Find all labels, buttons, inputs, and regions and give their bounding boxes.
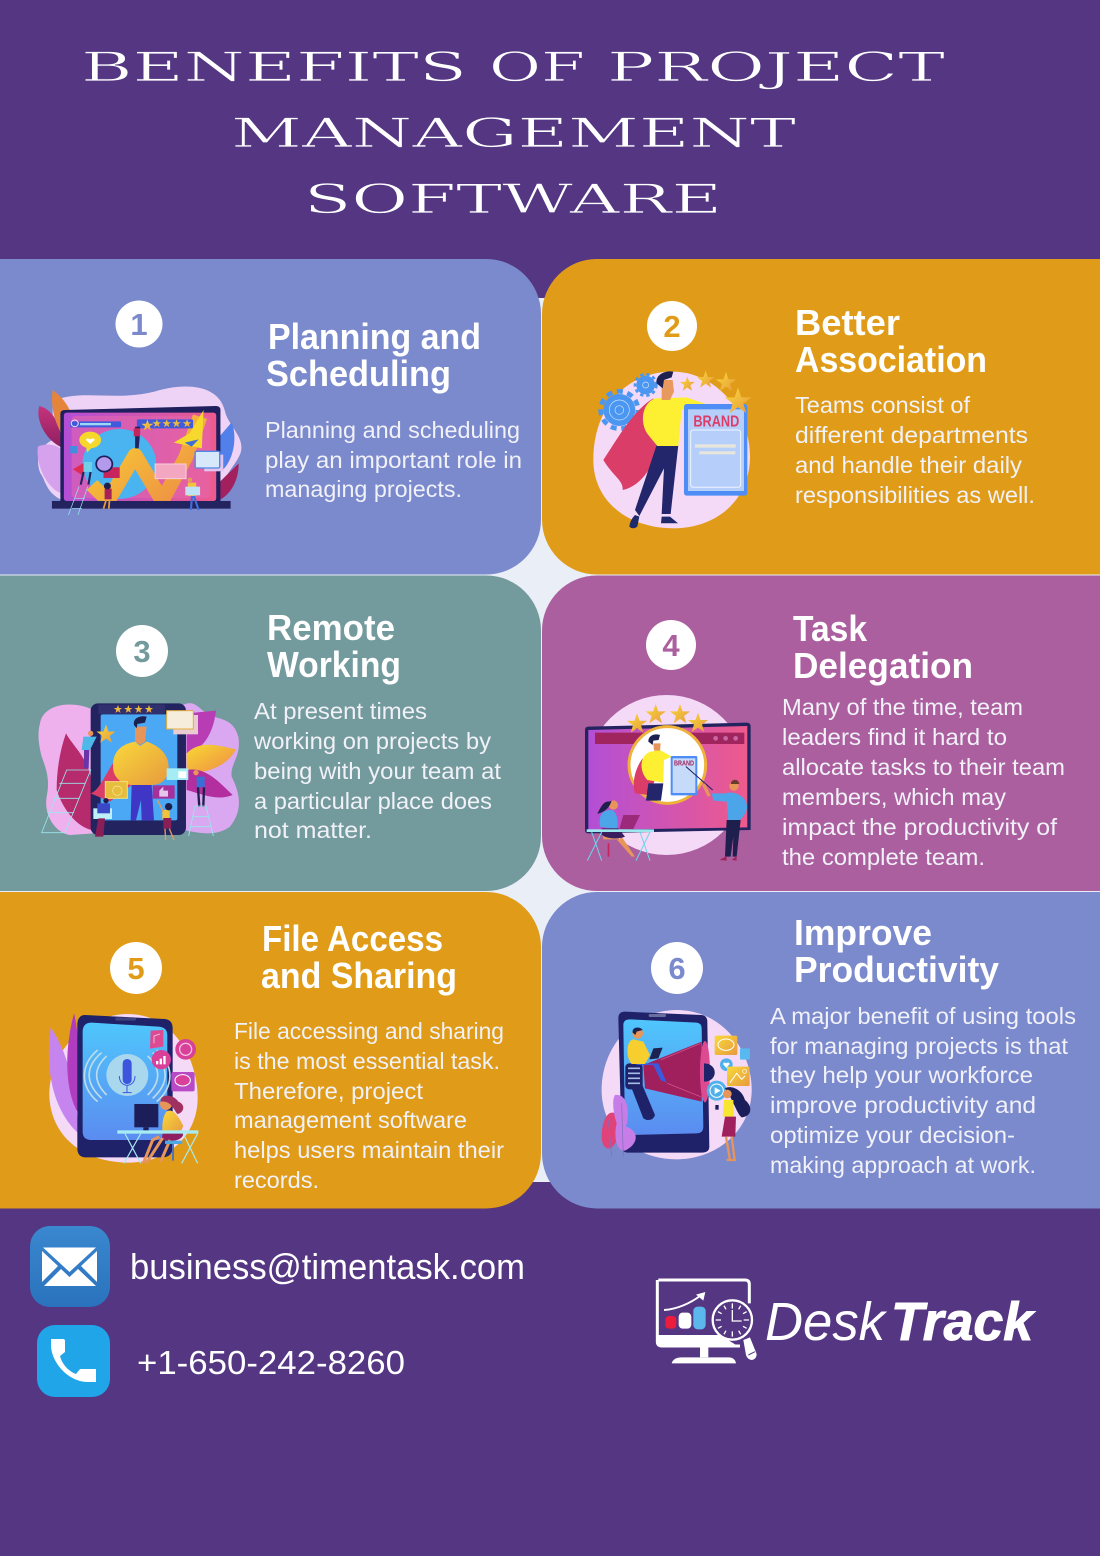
body text: and handle their daily — [795, 452, 1022, 478]
heading — [793, 608, 973, 686]
number badge 1: 1 — [130, 307, 148, 342]
phone number: +1-650-242-8260 — [137, 1344, 405, 1381]
body text: working on projects by — [253, 728, 491, 754]
number badge 4 — [646, 620, 696, 670]
icon: email — [30, 1226, 110, 1307]
heading: Delegation — [793, 645, 973, 686]
heading: Improve — [794, 912, 932, 953]
heading: Task — [793, 608, 868, 649]
number badge 1 — [116, 300, 162, 348]
body text: is the most essential task. — [234, 1048, 500, 1074]
body text: records. — [234, 1167, 319, 1193]
panel: task delegation — [542, 576, 1100, 891]
illustration: voice tablet — [49, 1013, 198, 1163]
body text — [795, 392, 1035, 508]
body text: a particular place does — [254, 788, 492, 814]
body text: At present times — [254, 698, 427, 724]
body text: leaders find it hard to — [782, 724, 1007, 750]
heading: Working — [267, 644, 401, 685]
title: SOFTWARE — [304, 177, 722, 223]
title: BENEFITS — [81, 45, 467, 91]
illustration: tablet with hero and team — [38, 703, 239, 840]
illustration: laptop with growth chart — [38, 386, 241, 515]
illustration: presentation screen: BRAND — [674, 759, 694, 768]
logo icon: monitor with clock magnifier — [657, 1280, 757, 1363]
number badge 5 — [110, 942, 162, 994]
number badge 6 — [651, 942, 703, 994]
illustration: phone with megaphone — [602, 1010, 752, 1160]
heading: Association — [795, 339, 987, 380]
body text — [265, 417, 522, 502]
panel: improve productivity — [542, 892, 1100, 1208]
body text: being with your team at — [254, 758, 501, 784]
body text: impact the productivity of — [782, 814, 1057, 840]
body text: Planning and scheduling — [265, 417, 520, 443]
heading: Planning and — [268, 316, 481, 357]
number badge 5: 5 — [127, 951, 145, 986]
heading: Remote — [267, 607, 395, 648]
body text: different departments — [795, 422, 1028, 448]
heading: Scheduling — [266, 353, 451, 394]
number badge 3: 3 — [133, 634, 151, 669]
email address: business@timentask.com — [130, 1246, 525, 1287]
body text: making approach at work. — [770, 1152, 1036, 1178]
icon: phone — [37, 1325, 110, 1397]
body text: allocate tasks to their team — [782, 754, 1065, 780]
body text: optimize your decision- — [770, 1122, 1015, 1148]
number badge 2 — [647, 301, 697, 351]
title: PROJECT — [607, 45, 946, 91]
heading — [795, 302, 987, 380]
body text — [782, 694, 1065, 870]
body text: responsibilities as well. — [795, 482, 1035, 508]
logo wordmark: Desk — [765, 1292, 888, 1352]
light centre backing — [0, 298, 1100, 1182]
logo wordmark: Track — [891, 1292, 1036, 1352]
heading: and Sharing — [261, 955, 457, 996]
illustration: superhero with brand board — [593, 371, 751, 528]
title: OF — [489, 45, 585, 91]
illustration: superhero with brand board: BRAND — [693, 414, 739, 431]
body text — [234, 1018, 504, 1193]
logo wordmark — [765, 1292, 1036, 1352]
body text: play an important role in — [265, 447, 522, 473]
body text — [770, 1003, 1076, 1178]
panel: file access and sharing — [0, 892, 541, 1208]
panel: remote working — [0, 576, 541, 891]
illustration: presentation screen — [585, 695, 751, 861]
body text: A major benefit of using tools — [770, 1003, 1076, 1029]
panel: better association — [542, 259, 1100, 574]
body text — [253, 698, 501, 843]
heading: Productivity — [794, 949, 999, 990]
title — [81, 45, 946, 223]
body text: not matter. — [254, 817, 372, 843]
body text: Therefore, project — [234, 1078, 423, 1104]
body text: the complete team. — [782, 844, 985, 870]
body text: management software — [234, 1107, 467, 1133]
body text: managing projects. — [265, 476, 462, 502]
body text: improve productivity and — [770, 1092, 1036, 1118]
logo: DeskTrack — [657, 1280, 1036, 1363]
heading — [794, 912, 999, 990]
body text: members, which may — [782, 784, 1006, 810]
body text: File accessing and sharing — [234, 1018, 504, 1044]
body text: for managing projects is that — [770, 1033, 1068, 1059]
body text: helps users maintain their — [234, 1137, 504, 1163]
number badge 4: 4 — [662, 628, 680, 663]
heading: Better — [795, 302, 900, 343]
number badge 2: 2 — [663, 309, 681, 344]
heading — [261, 918, 457, 996]
number badge 3 — [116, 625, 168, 677]
heading: File Access — [262, 918, 443, 959]
heading — [267, 607, 401, 685]
heading — [266, 316, 481, 394]
body text: Teams consist of — [795, 392, 970, 418]
title: MANAGEMENT — [231, 111, 797, 157]
body text: they help your workforce — [770, 1062, 1033, 1088]
body text: Many of the time, team — [782, 694, 1023, 720]
panel: planning and scheduling — [0, 259, 541, 574]
number badge 6: 6 — [668, 951, 686, 986]
